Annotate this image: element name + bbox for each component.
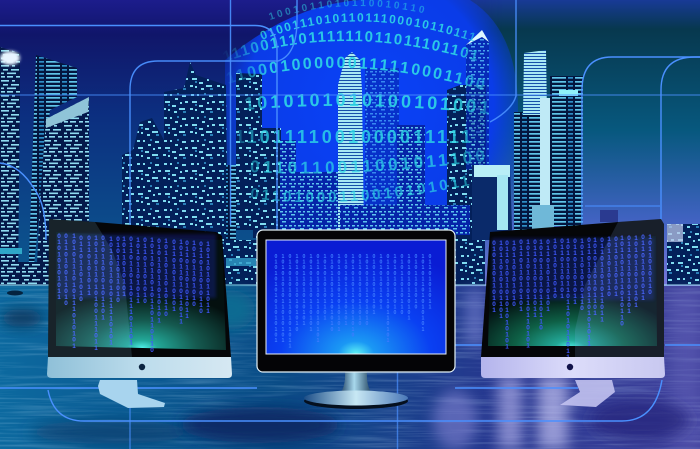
binary digits on cylinder: 1101111001000011111: [236, 130, 470, 143]
right monitor: binary rain: 01101101011011: [598, 237, 606, 322]
right monitor: binary rain: 1011010110: [646, 234, 654, 295]
left monitor: binary rain: 011011011011101101: [128, 236, 134, 346]
right monitor: binary rain: 0110110101101: [626, 235, 632, 314]
right monitor: binary rain: 011011010110101011: [586, 237, 592, 347]
center monitor: stand neck: [338, 372, 374, 396]
left monitor: binary rain: 01010101011: [56, 233, 62, 300]
left monitor: binary rain: 011010110101: [170, 239, 178, 312]
right monitor: binary rain: 101011010110110: [538, 239, 544, 331]
right monitor: bezel: [481, 219, 664, 357]
center monitor: binary rain: 01011010110: [399, 254, 405, 316]
center monitor: binary rain: 10101101010101: [420, 254, 426, 332]
left monitor: binary rain: 10101101010: [190, 240, 198, 307]
left monitor: binary rain: 1011011010110: [162, 238, 170, 317]
right monitor: glass reflection: [575, 219, 664, 357]
right monitor: binary rain: 1011011010: [552, 238, 558, 299]
center monitor: binary rain: 0110101011010101: [315, 254, 321, 344]
center monitor: binary rain: 1010101011010101: [280, 254, 286, 344]
left monitor: binary rain: 1010111010111010101: [70, 233, 78, 349]
right monitor: binary rain: 10101101101101011011: [564, 238, 572, 360]
right monitor: screen: [488, 236, 657, 346]
right monitor: binary rain: 101101010110110101: [524, 239, 532, 349]
left monitor: binary rain: 1011010101: [120, 236, 128, 297]
left monitor: binary rain: 01101101010: [142, 237, 148, 304]
left monitor: bezel: [48, 219, 231, 357]
center monitor: bezel: [257, 230, 455, 372]
right monitor: binary rain: 01101101011: [640, 234, 646, 301]
center monitor: binary rain: 0110101011010: [357, 254, 363, 327]
right monitor: binary rain: 10110101010: [510, 240, 518, 307]
left monitor: binary rain: 1011011010100111011: [92, 235, 100, 351]
left monitor: binary rain: 0110110101011: [184, 240, 190, 319]
right monitor: blue haze: [492, 238, 654, 300]
center monitor: binary rain: 101010101101: [322, 254, 328, 321]
right monitor: binary rain: 0110110101: [612, 236, 620, 297]
right monitor: binary rain: 01101101011: [572, 238, 578, 305]
binary digits on cylinder: 0110110011001011100: [250, 150, 484, 174]
center monitor: binary rain: 0110101011: [427, 254, 433, 310]
center monitor: binary rain: 01011010101: [371, 254, 377, 316]
binary data cylinder glow: [225, 0, 518, 235]
left monitor: blue haze: [58, 234, 216, 298]
right monitor: binary rain: 011010110101010101: [504, 240, 510, 350]
skyline: right buildings: [365, 30, 700, 285]
center monitor: binary rain: 0110101010110101: [385, 254, 391, 344]
center monitor: binary rain: [273, 254, 433, 349]
left monitor: binary rain: [56, 233, 212, 353]
center monitor: binary rain: 0101010101010101: [273, 254, 279, 344]
left monitor: screen: [56, 232, 226, 350]
left monitor: binary rain: 01101101010: [78, 235, 84, 302]
center monitor: binary rain: 01011010101010: [329, 254, 335, 332]
right monitor: binary rain: 1010110101101: [592, 237, 598, 316]
left monitor: binary rain: 101101011011: [204, 241, 212, 314]
center monitor: [257, 230, 455, 409]
center monitor: binary rain: 101010110101010: [350, 254, 356, 338]
center monitor: binary rain: 0101101010101: [301, 254, 307, 327]
center monitor: binary rain: 1010101101: [378, 254, 384, 310]
right monitor: binary rain: 0110110101011: [532, 239, 538, 318]
center monitor: binary rain: 0101101010: [413, 254, 419, 310]
left monitor: stand: [98, 380, 165, 408]
center monitor: binary rain: 10101101010101: [336, 254, 342, 332]
left monitor: glass reflection: [48, 219, 132, 357]
center monitor: screen: [266, 240, 446, 354]
left monitor: binary rain: 011011010110: [198, 241, 204, 314]
skyline: center tower: [338, 52, 364, 232]
left monitor: binary rain: 101101101011110101: [108, 236, 114, 346]
center monitor: binary rain: 1010101101010: [364, 254, 370, 327]
binary digits on cylinder: [224, 0, 488, 202]
center monitor: binary rain: 10101010110101: [308, 254, 314, 332]
binary digits on cylinder: 01101000110010101011: [251, 176, 470, 202]
center monitor: binary rain: 01101010110101011: [287, 254, 293, 349]
center monitor: binary rain: 0101011010101: [343, 254, 349, 327]
left monitor: [47, 219, 232, 408]
right monitor: binary rain: 011011010101: [518, 239, 524, 312]
water: [0, 286, 700, 449]
left monitor: binary rain: 10101101011011: [178, 239, 184, 324]
skyline: lit waterfront band: [0, 205, 700, 286]
binary digits on cylinder: 1010101010100101001: [245, 93, 488, 114]
right monitor: binary rain: 011010110101: [544, 239, 552, 312]
right monitor: binary rain: [490, 234, 654, 360]
right monitor: binary rain: 101101011010110: [618, 235, 626, 327]
right monitor: camera dot: [567, 364, 573, 370]
center monitor: binary rain: 10101011010: [392, 254, 398, 316]
left monitor: binary rain: 011010011010: [62, 233, 70, 306]
skyline: left buildings: [0, 47, 341, 285]
left monitor: binary rain: 01011011010101: [156, 238, 162, 323]
left monitor: chin: [47, 357, 232, 378]
right monitor: binary rain: 0110110101: [558, 238, 566, 299]
right monitor: binary rain: 010110110101: [490, 240, 498, 313]
center monitor: binary rain: 10101010101010: [294, 254, 300, 332]
right monitor: binary rain: 101101010110: [578, 238, 586, 311]
left monitor: binary rain: 01011011010: [114, 236, 122, 303]
right monitor: chin: [481, 357, 665, 378]
left monitor: binary rain: 10101101011: [134, 237, 142, 304]
left monitor: binary rain: 01011010101101: [100, 235, 106, 320]
right monitor: [481, 219, 665, 407]
left monitor: binary rain: 1011011010110110110: [148, 237, 156, 353]
center monitor: stand base: [304, 390, 408, 409]
center monitor: binary rain: 101010110101: [406, 254, 412, 321]
right monitor: binary rain: 1011010110: [606, 236, 612, 297]
right monitor: stand: [560, 380, 615, 407]
right monitor: binary rain: 101011010101: [632, 235, 640, 308]
left monitor: binary rain: 0110101011: [86, 235, 92, 296]
left monitor: camera dot: [139, 364, 145, 370]
background: night sky: [0, 0, 700, 290]
right monitor: binary rain: 1011010101101: [498, 240, 504, 319]
